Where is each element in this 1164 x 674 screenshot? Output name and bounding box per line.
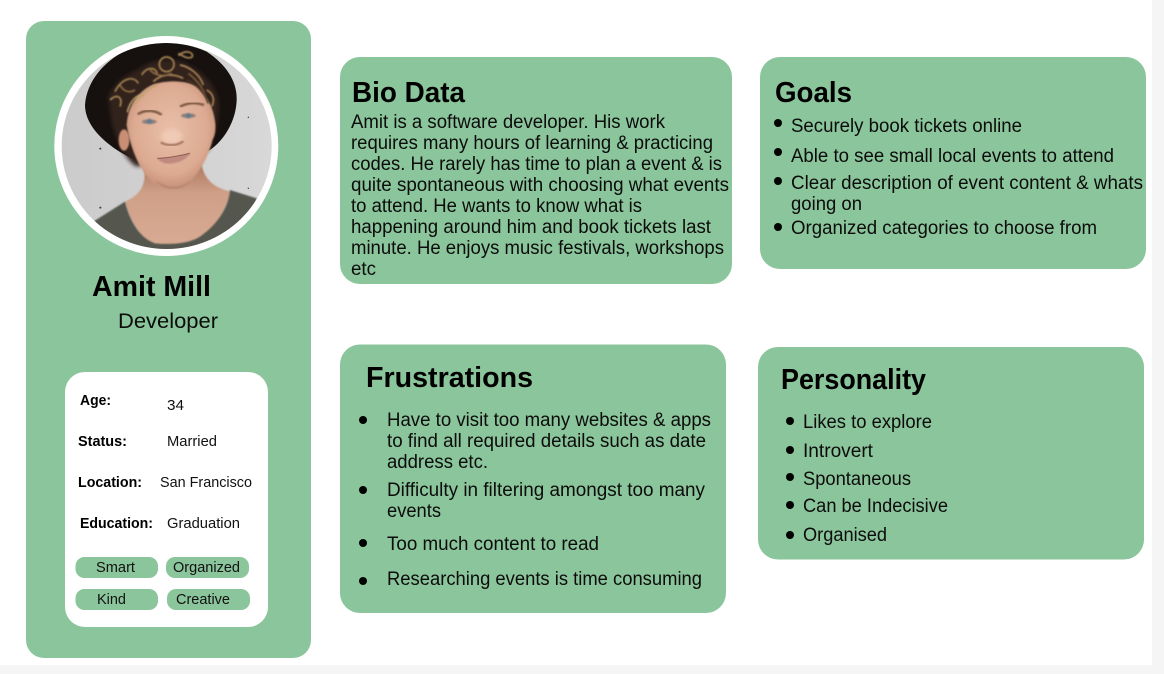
bio text: minute. He enjoys music festivals, workshops <box>351 238 724 259</box>
chin shadow <box>158 182 188 189</box>
goals list: Securely book tickets online <box>791 116 1022 137</box>
goals list: Able to see small local events to attend <box>791 146 1114 167</box>
role: Developer <box>118 309 218 333</box>
status: Married <box>167 434 217 450</box>
tag: smart <box>76 557 158 578</box>
neck and chest <box>125 165 231 245</box>
frustrations list: Researching events is time consuming <box>387 569 702 590</box>
panel: bio data <box>340 57 732 284</box>
bio text <box>351 112 729 280</box>
bio text: happening around him and book tickets last <box>351 217 712 238</box>
frustrations list <box>359 410 711 590</box>
name: Amit Mill <box>92 271 211 303</box>
hair <box>108 60 219 167</box>
frustrations list: Too much content to read <box>387 534 599 555</box>
face <box>127 81 215 188</box>
goals list: Organized categories to choose from <box>791 218 1097 239</box>
details card <box>65 372 268 627</box>
goals list: going on <box>791 194 862 215</box>
frustrations list: Difficulty in filtering amongst too many <box>387 480 705 501</box>
tag: organized: Organized <box>173 560 240 576</box>
age: Age: <box>80 393 111 409</box>
eyes <box>142 113 196 124</box>
shirt <box>93 190 257 255</box>
personality list: Organised <box>803 525 887 546</box>
panel: goals <box>760 57 1146 269</box>
tag: kind: Kind <box>97 592 126 608</box>
ear <box>119 129 129 151</box>
tag: creative: Creative <box>176 592 230 608</box>
portrait photo <box>54 36 278 256</box>
tag: organized <box>166 557 249 578</box>
education: Graduation <box>167 516 240 532</box>
goals list <box>774 116 1143 239</box>
age <box>80 393 184 414</box>
bio text: codes. He rarely has time to plan a event & is <box>351 154 722 175</box>
location: San Francisco <box>160 475 252 491</box>
personality list <box>786 412 948 546</box>
goals list: Clear description of event content & whats <box>791 173 1143 194</box>
heading: frustrations: Frustrations <box>366 362 533 394</box>
heading: goals: Goals <box>775 77 852 109</box>
panel: personality <box>758 347 1144 560</box>
frustrations list: events <box>387 501 441 522</box>
mouth <box>157 153 190 164</box>
frustrations list: Have to visit too many websites & apps <box>387 410 711 431</box>
panel: frustrations <box>340 344 726 613</box>
brows <box>138 111 162 115</box>
personality list: Likes to explore <box>803 412 932 433</box>
location <box>78 475 252 491</box>
status <box>78 434 217 450</box>
education <box>80 516 240 532</box>
frustrations list: address etc. <box>387 452 488 473</box>
bio text: to attend. He wants to know what is <box>351 196 642 217</box>
heading: bio data: Bio Data <box>352 77 466 109</box>
personality list: Spontaneous <box>803 469 911 490</box>
bio text: quite spontaneous with choosing what events <box>351 175 729 196</box>
education: Education: <box>80 516 153 532</box>
frustrations list: to find all required details such as date <box>387 431 706 452</box>
bio text: etc <box>351 259 376 280</box>
bio text: requires many hours of learning & practicing <box>351 133 713 154</box>
location: Location: <box>78 475 142 491</box>
nose <box>161 129 182 144</box>
age: 34 <box>167 398 184 414</box>
tag: smart: Smart <box>96 560 135 576</box>
tag: kind <box>76 589 158 610</box>
personality list: Can be Indecisive <box>803 496 948 517</box>
status: Status: <box>78 434 127 450</box>
bio text: Amit is a software developer. His work <box>351 112 665 133</box>
heading: personality: Personality <box>781 364 926 396</box>
fringe <box>127 80 208 112</box>
hat <box>85 43 237 160</box>
personality list: Introvert <box>803 441 874 462</box>
tag: creative <box>167 589 250 610</box>
panel: profile <box>26 21 311 658</box>
